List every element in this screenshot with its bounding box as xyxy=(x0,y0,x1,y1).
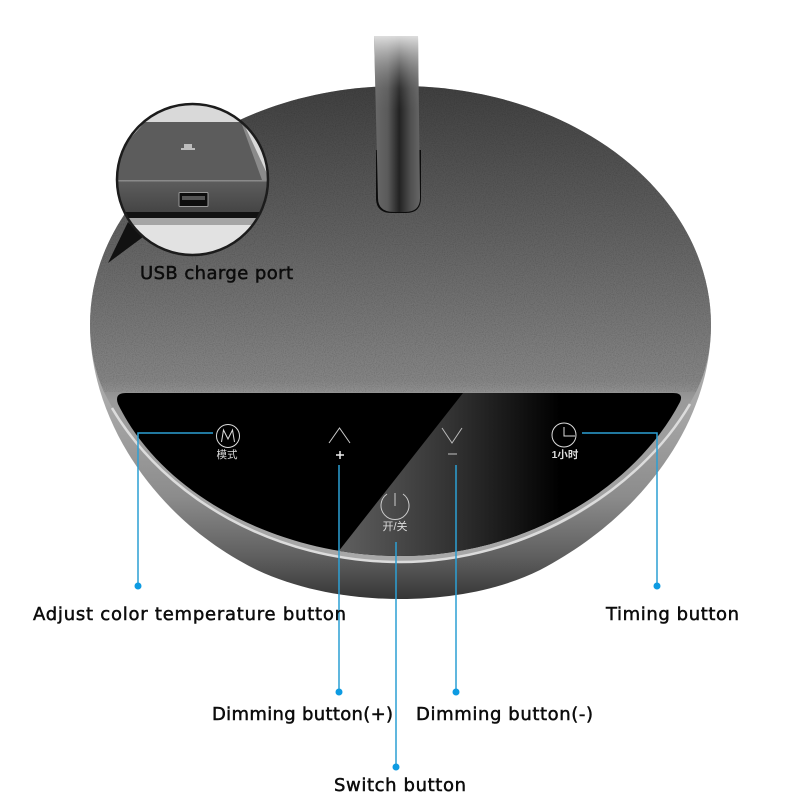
label: adjust color temperature button: Adjust color temperature button xyxy=(33,604,346,625)
label: dimming minus button: Dimming button(-) xyxy=(416,704,593,725)
inset pointer wedge xyxy=(108,222,143,263)
leader: dimming minus xyxy=(452,465,460,696)
icon: mode button: 模式 xyxy=(216,448,238,461)
leader: timing xyxy=(582,433,660,590)
label: dimming plus button: Dimming button(+) xyxy=(212,704,393,725)
lamp base xyxy=(90,86,711,599)
bevel highlight xyxy=(112,404,690,562)
icon: timer button: 1小时 xyxy=(552,448,579,461)
label: timing button: Timing button xyxy=(605,604,739,625)
label: USB charge port: USB charge port xyxy=(140,263,293,284)
surface grain xyxy=(90,86,711,392)
base rim xyxy=(90,86,711,599)
icon: timer button xyxy=(552,423,579,461)
icon: mode button xyxy=(216,424,240,461)
neck highlight xyxy=(374,36,420,212)
leader: dimming plus xyxy=(336,465,342,696)
base top face xyxy=(90,86,711,562)
inset circle contents xyxy=(118,105,267,254)
icon: dimming down button xyxy=(442,428,462,454)
leader: switch xyxy=(392,542,400,770)
neck xyxy=(374,36,420,212)
icon: USB socket xyxy=(179,192,208,206)
slot shadow xyxy=(376,150,421,213)
icon: dimming up button xyxy=(329,428,350,459)
inset ring xyxy=(117,104,268,255)
icon: power button: 开/关 xyxy=(382,519,408,533)
gooseneck stem xyxy=(374,36,421,213)
inset: USB port close-up xyxy=(108,102,272,263)
glass reflection xyxy=(338,393,600,570)
black glass xyxy=(117,393,681,556)
label: switch button: Switch button xyxy=(334,775,466,796)
leader: adjust color temperature xyxy=(134,433,213,590)
icon: power button xyxy=(381,493,409,533)
touch panel xyxy=(117,393,681,570)
